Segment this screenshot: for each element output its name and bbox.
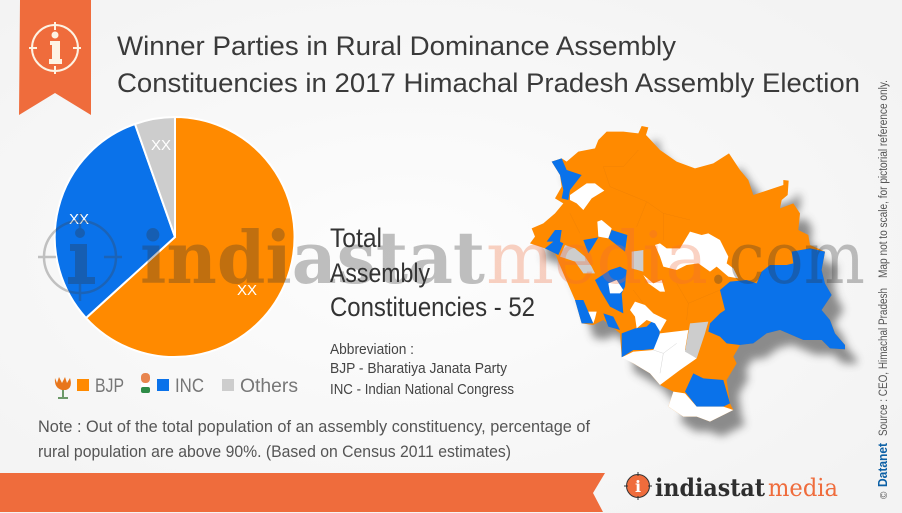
title: Winner Parties in Rural Dominance Assembly	[117, 31, 677, 61]
side credits: ©	[879, 491, 890, 499]
total constituencies text: Total	[330, 223, 382, 253]
pie labels: XX	[237, 282, 257, 299]
footer bar	[0, 473, 605, 512]
abbreviation block: BJP - Bharatiya Janata Party	[330, 360, 507, 377]
note	[38, 417, 590, 461]
abbreviation block	[330, 341, 514, 398]
abbreviation block: Abbreviation :	[330, 341, 414, 358]
title	[117, 31, 860, 98]
ribbon info icon	[19, 0, 91, 115]
legend	[55, 373, 298, 398]
legend: Others	[240, 376, 298, 397]
side credits	[876, 80, 890, 499]
watermark: media	[486, 216, 708, 300]
total constituencies text: Constituencies - 52	[330, 292, 535, 322]
watermark: indiastat	[140, 215, 485, 300]
watermark	[38, 213, 865, 301]
footer logo: i	[635, 477, 641, 496]
pie labels	[69, 137, 257, 299]
pie labels: XX	[151, 137, 171, 154]
total constituencies text	[330, 223, 535, 322]
icon: INC hand	[141, 373, 150, 393]
footer logo	[624, 472, 838, 502]
total constituencies text: Assembly	[330, 258, 430, 288]
note: Note : Out of the total population of an assembly constituency, percentage of	[38, 417, 590, 436]
pie chart	[55, 117, 295, 357]
watermark: .com	[708, 216, 865, 300]
side credits: Datanet	[876, 442, 890, 487]
title: Constituencies in 2017 Himachal Pradesh Assembly Election	[117, 68, 860, 98]
icon: BJP lotus	[55, 377, 71, 398]
legend: BJP	[95, 376, 124, 397]
map of Himachal Pradesh	[530, 126, 857, 436]
note: rural population are above 90%. (Based on Census 2011 estimates)	[38, 442, 511, 461]
side credits: Source : CEO, Himachal Pradesh	[878, 288, 890, 436]
side credits: Map not to scale, for pictorial reference only.	[878, 80, 890, 278]
footer logo: indiastat	[655, 473, 765, 502]
pie labels: XX	[69, 211, 89, 228]
footer logo: media	[768, 474, 838, 502]
abbreviation block: INC - Indian National Congress	[330, 381, 514, 398]
legend: INC	[175, 376, 204, 397]
